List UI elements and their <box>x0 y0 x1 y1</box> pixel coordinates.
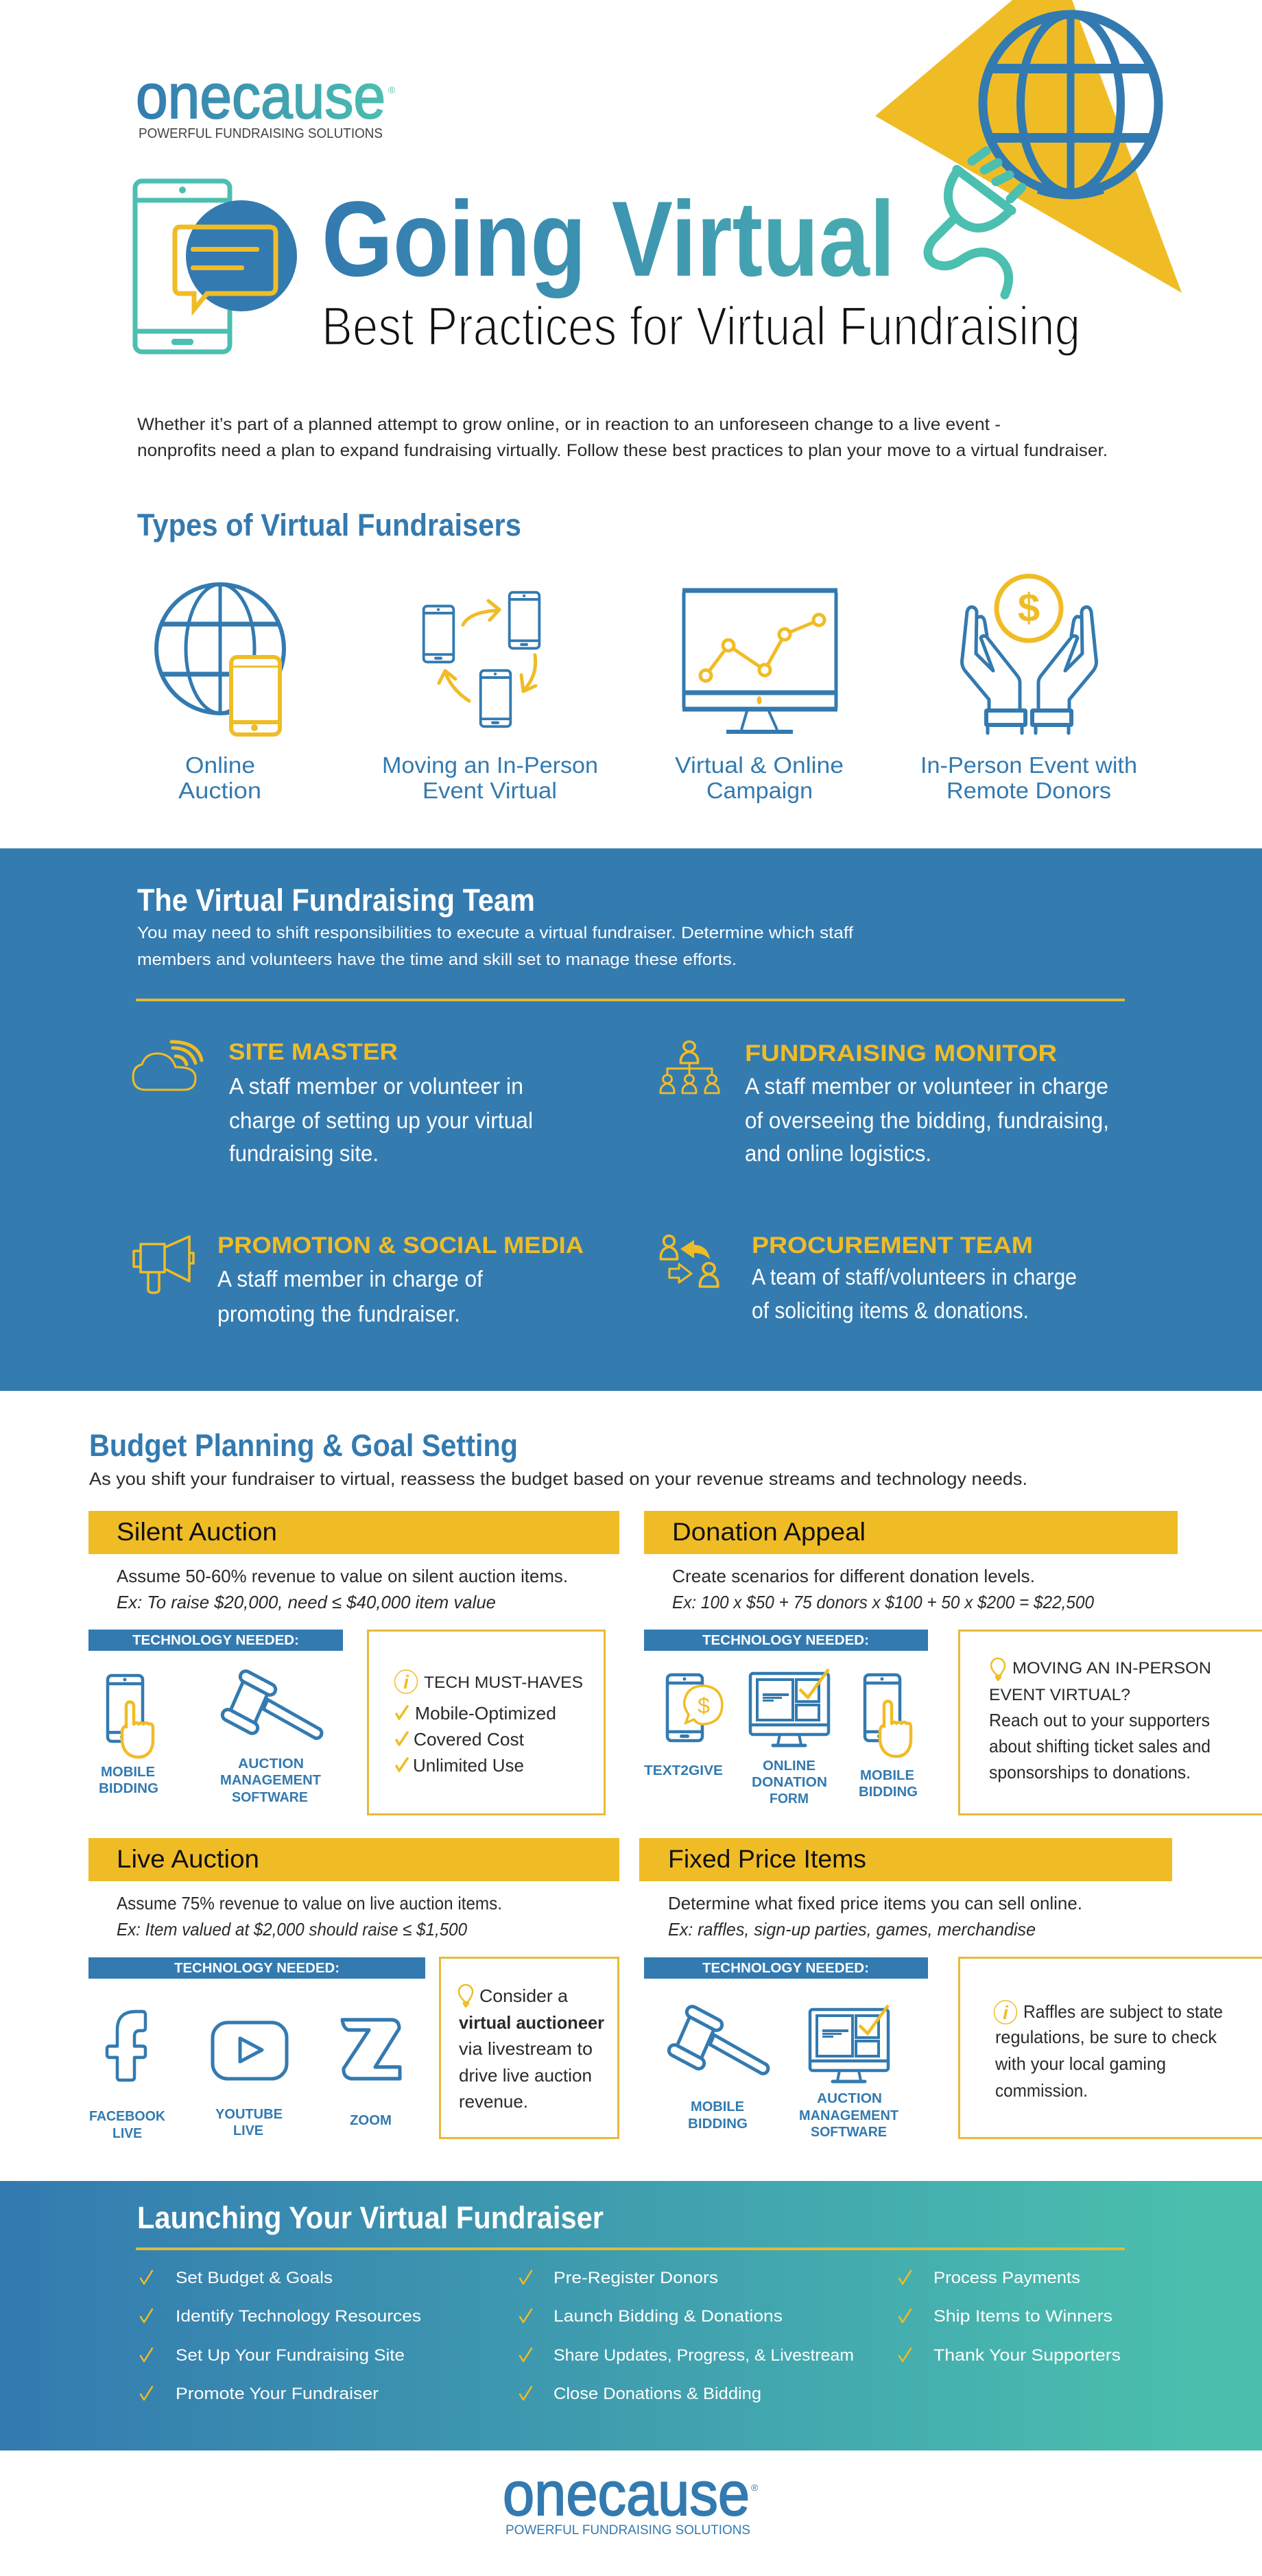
technology needed bar: TECHNOLOGY NEEDED: <box>132 1633 299 1648</box>
technology needed bar <box>644 1630 928 1651</box>
label: moving an in-person event virtual <box>382 752 598 803</box>
label: online donation form: DONATION <box>752 1775 827 1790</box>
title: Going Virtual <box>322 180 895 299</box>
callout: tech must-haves: Covered Cost <box>414 1729 525 1750</box>
label: auction management software: AUCTION <box>817 2091 882 2106</box>
callout: virtual auctioneer: Consider a <box>479 1985 569 2006</box>
callout: tech must-haves <box>368 1631 605 1815</box>
panel: launching your virtual fundraiser <box>0 2181 1262 2450</box>
technology needed bar <box>88 1630 343 1651</box>
fixed price description <box>668 1893 1082 1940</box>
callout: raffles regulations: with your local gaming <box>995 2053 1166 2074</box>
callout: moving an in-person event virtual: EVENT VIRTUAL? <box>989 1686 1130 1704</box>
callout: moving an in-person event virtual: about shifting ticket sales and <box>989 1736 1211 1756</box>
label: online auction: Auction <box>178 778 261 803</box>
label: auction management software: SOFTWARE <box>232 1790 308 1805</box>
checklist: column 3: Process Payments <box>933 2269 1080 2287</box>
label: auction management software: MANAGEMENT <box>220 1773 321 1788</box>
icon: youtube <box>213 2023 287 2079</box>
callout: tech must-haves: Mobile-Optimized <box>415 1703 556 1724</box>
icon: megaphone <box>134 1237 193 1293</box>
technology needed bar: TECHNOLOGY NEEDED: <box>702 1961 869 1976</box>
icon: cloud with wifi <box>133 1042 202 1090</box>
heading: types: Types of Virtual Fundraisers <box>137 508 521 542</box>
checklist: column 3: Ship Items to Winners <box>933 2307 1112 2326</box>
label: facebook live <box>89 2109 166 2141</box>
icon: auction management software <box>810 2005 888 2082</box>
icon: hands with coin <box>962 576 1096 733</box>
icon: gavel <box>667 2005 768 2073</box>
icon: plug and cable <box>928 151 1022 295</box>
callout: virtual auctioneer: drive live auction <box>459 2065 592 2086</box>
checkmarks <box>141 2271 911 2400</box>
live auction description <box>117 1893 502 1940</box>
label: online auction: Online <box>185 752 255 778</box>
label: auction management software: SOFTWARE <box>811 2125 887 2140</box>
label: in-person event with remote donors <box>920 752 1137 803</box>
checklist: column 1: Set Up Your Fundraising Site <box>176 2346 405 2365</box>
label: virtual and online campaign: Campaign <box>706 778 813 803</box>
role: fundraising monitor: and online logistics. <box>745 1141 931 1166</box>
logo: onecause top: ® <box>388 84 396 95</box>
icon: mobile bidding <box>865 1675 911 1756</box>
donation appeal description: Ex: 100 x $50 + 75 donors x $100 + 50 x $200 = $22,500 <box>672 1592 1094 1612</box>
label: zoom: ZOOM <box>350 2113 392 2128</box>
panel: live auction: Live Auction <box>117 1845 259 1873</box>
silent auction description: Ex: To raise $20,000, need ≤ $40,000 item value <box>117 1592 496 1612</box>
icon: mobile bidding <box>108 1675 153 1757</box>
intro text <box>137 415 1108 460</box>
label: mobile bidding: BIDDING <box>859 1785 918 1800</box>
role: fundraising monitor: of overseeing the bidding, fundraising, <box>745 1108 1109 1133</box>
label: online donation form: ONLINE <box>763 1758 815 1774</box>
panel: silent auction: Silent Auction <box>117 1518 277 1546</box>
label: virtual and online campaign: Virtual & Online <box>675 752 844 778</box>
panel: silent auction <box>88 1511 619 1815</box>
callout: raffles regulations: Raffles are subject to state <box>1023 2001 1223 2022</box>
yellow triangle <box>875 0 1182 293</box>
label: youtube live <box>215 2107 283 2138</box>
checklist: column 1: Set Budget & Goals <box>176 2269 333 2287</box>
silent auction description <box>117 1566 568 1612</box>
label: mobile bidding: BIDDING <box>688 2116 748 2132</box>
donation appeal description: Create scenarios for different donation levels. <box>672 1566 1035 1586</box>
label: mobile bidding <box>859 1768 918 1800</box>
checklist: column 3 <box>933 2269 1121 2365</box>
intro text: nonprofits need a plan to expand fundraising virtually. Follow these best practices to plan your move to a virtual fundraiser. <box>137 441 1108 460</box>
checklist: column 1: Promote Your Fundraiser <box>176 2385 379 2403</box>
panel: donation appeal <box>644 1511 1262 1815</box>
role: promotion and social media: PROMOTION & SOCIAL MEDIA <box>217 1232 584 1259</box>
label: auction management software <box>220 1756 321 1805</box>
role: fundraising monitor <box>745 1040 1109 1166</box>
role: procurement team: A team of staff/volunteers in charge <box>752 1264 1077 1289</box>
label: youtube live: YOUTUBE <box>215 2107 283 2122</box>
live auction description: Ex: Item valued at $2,000 should raise ≤ $1,500 <box>117 1919 467 1940</box>
label: auction management software: AUCTION <box>238 1756 304 1772</box>
role: fundraising monitor: FUNDRAISING MONITOR <box>745 1040 1057 1066</box>
panel: live auction <box>88 1838 619 2141</box>
label: mobile bidding: MOBILE <box>860 1768 914 1783</box>
technology needed bar: TECHNOLOGY NEEDED: <box>702 1633 869 1648</box>
checklist: column 1 <box>176 2269 421 2403</box>
callout: virtual auctioneer <box>440 1957 619 2138</box>
role: site master: charge of setting up your virtual <box>229 1108 533 1133</box>
icon: hands with coin: $ <box>1018 586 1040 630</box>
icon: text2give: $ <box>698 1693 710 1718</box>
callout: moving an in-person event virtual <box>959 1631 1262 1815</box>
label: mobile bidding: MOBILE <box>101 1765 155 1780</box>
label: youtube live: LIVE <box>233 2123 263 2138</box>
heading: budget planning: Budget Planning & Goal Setting <box>89 1428 518 1463</box>
icon: text2give <box>667 1675 722 1741</box>
role: promotion and social media: A staff member in charge of <box>217 1266 484 1291</box>
panel: fixed price items <box>639 1838 1262 2140</box>
callout: tech must-haves: TECH MUST-HAVES <box>424 1673 583 1692</box>
label: moving an in-person event virtual: Event Virtual <box>422 778 557 803</box>
logo: onecause top: POWERFUL FUNDRAISING SOLUTIONS <box>139 126 383 141</box>
role: promotion and social media: promoting the fundraiser. <box>217 1301 460 1326</box>
logo: onecause bottom: POWERFUL FUNDRAISING SOLUTIONS <box>505 2523 750 2538</box>
label: online auction <box>178 752 261 803</box>
callout: tech must-haves: Unlimited Use <box>413 1755 524 1776</box>
panel: donation appeal: Donation Appeal <box>672 1518 866 1546</box>
panel: types of virtual fundraisers <box>137 508 1137 803</box>
label: mobile bidding <box>688 2099 748 2132</box>
callout: virtual auctioneer: virtual auctioneer <box>459 2012 604 2033</box>
checklist: column 2: Launch Bidding & Donations <box>553 2307 783 2326</box>
callout: raffles regulations: regulations, be sure to check <box>995 2027 1217 2047</box>
icon: gavel <box>221 1669 322 1738</box>
icon: procurement exchange <box>660 1236 718 1287</box>
callout: raffles regulations: commission. <box>995 2080 1088 2101</box>
label: virtual and online campaign <box>675 752 844 803</box>
role: promotion and social media <box>217 1232 584 1326</box>
label: mobile bidding <box>99 1765 158 1796</box>
fixed price description: Determine what fixed price items you can sell online. <box>668 1893 1082 1913</box>
technology needed bar: TECHNOLOGY NEEDED: <box>174 1961 340 1976</box>
role: site master: fundraising site. <box>229 1141 379 1166</box>
label: in-person event with remote donors: Remote Donors <box>946 778 1111 803</box>
callout: raffles regulations <box>959 1957 1262 2138</box>
checklist: column 3: Thank Your Supporters <box>933 2346 1121 2365</box>
icon: large globe <box>983 14 1158 195</box>
icon: online donation form <box>750 1669 829 1745</box>
callout: virtual auctioneer: revenue. <box>459 2091 528 2112</box>
heading: launching: Launching Your Virtual Fundraiser <box>137 2200 604 2235</box>
callout: virtual auctioneer: via livestream to <box>459 2038 593 2059</box>
team intro: members and volunteers have the time and skill set to manage these efforts. <box>137 951 737 969</box>
label: moving an in-person event virtual: Moving an In-Person <box>382 752 598 778</box>
callout: moving an in-person event virtual: Reach out to your supporters <box>989 1710 1210 1730</box>
live auction description: Assume 75% revenue to value on live auction items. <box>117 1893 502 1913</box>
label: auction management software <box>799 2091 898 2140</box>
subtitle: Best Practices for Virtual Fundraising <box>322 296 1080 357</box>
logo: onecause bottom: ® <box>751 2482 759 2493</box>
callout: moving an in-person event virtual: sponsorships to donations. <box>989 1762 1191 1782</box>
team intro <box>137 924 853 969</box>
role: site master <box>228 1039 533 1166</box>
role: site master: SITE MASTER <box>228 1039 398 1065</box>
panel: fixed price items: Fixed Price Items <box>668 1845 866 1873</box>
technology needed bar <box>644 1957 928 1979</box>
icon: monitor with line chart <box>682 590 837 734</box>
checklist: column 2: Pre-Register Donors <box>553 2269 718 2287</box>
heading: team: The Virtual Fundraising Team <box>137 883 535 918</box>
label: facebook live: LIVE <box>112 2126 142 2141</box>
fixed price description: Ex: raffles, sign-up parties, games, merchandise <box>668 1919 1036 1940</box>
icon: three phones with arrows <box>424 593 539 726</box>
panel: virtual fundraising team <box>0 848 1262 1391</box>
role: procurement team: of soliciting items & donations. <box>752 1298 1029 1323</box>
label: mobile bidding: MOBILE <box>691 2099 744 2114</box>
role: procurement team: PROCUREMENT TEAM <box>752 1232 1033 1259</box>
label: facebook live: FACEBOOK <box>89 2109 166 2124</box>
silent auction description: Assume 50-60% revenue to value on silent auction items. <box>117 1566 568 1586</box>
callout: raffles regulations: i <box>1003 2002 1009 2023</box>
label: text2give: TEXT2GIVE <box>644 1763 723 1778</box>
icon: globe with phone <box>156 584 284 735</box>
label: online donation form: FORM <box>770 1791 809 1806</box>
role: procurement team <box>752 1232 1077 1323</box>
callout: tech must-haves: i <box>403 1671 409 1693</box>
role: fundraising monitor: A staff member or volunteer in charge <box>745 1073 1108 1099</box>
icon: org chart <box>660 1042 719 1093</box>
role: site master: A staff member or volunteer in <box>229 1073 523 1099</box>
label: mobile bidding: BIDDING <box>99 1781 158 1796</box>
label: online donation form <box>752 1758 827 1806</box>
checklist: column 1: Identify Technology Resources <box>176 2307 421 2326</box>
logo: onecause top: onecause <box>136 62 385 132</box>
team intro: You may need to shift responsibilities to execute a virtual fundraiser. Determine which staff <box>137 924 853 942</box>
callout: moving an in-person event virtual: MOVING AN IN-PERSON <box>1012 1659 1211 1678</box>
intro text: Whether it’s part of a planned attempt to grow online, or in reaction to an unforeseen change to a live event - <box>137 415 1001 434</box>
budget intro: As you shift your fundraiser to virtual, reassess the budget based on your revenue streams and technology needs. <box>89 1468 1027 1489</box>
label: in-person event with remote donors: In-Person Event with <box>920 752 1137 778</box>
checklist: column 2: Share Updates, Progress, & Livestream <box>553 2346 854 2365</box>
checklist: column 2: Close Donations & Bidding <box>553 2385 761 2403</box>
icon: facebook <box>107 2012 145 2080</box>
icon: phone with chat bubble <box>135 181 297 352</box>
label: auction management software: MANAGEMENT <box>799 2108 898 2123</box>
checklist: column 2 <box>553 2269 854 2403</box>
technology needed bar <box>88 1957 425 1979</box>
logo: onecause bottom: onecause <box>503 2460 750 2529</box>
icon: zoom <box>342 2020 400 2079</box>
donation appeal description <box>672 1566 1094 1612</box>
